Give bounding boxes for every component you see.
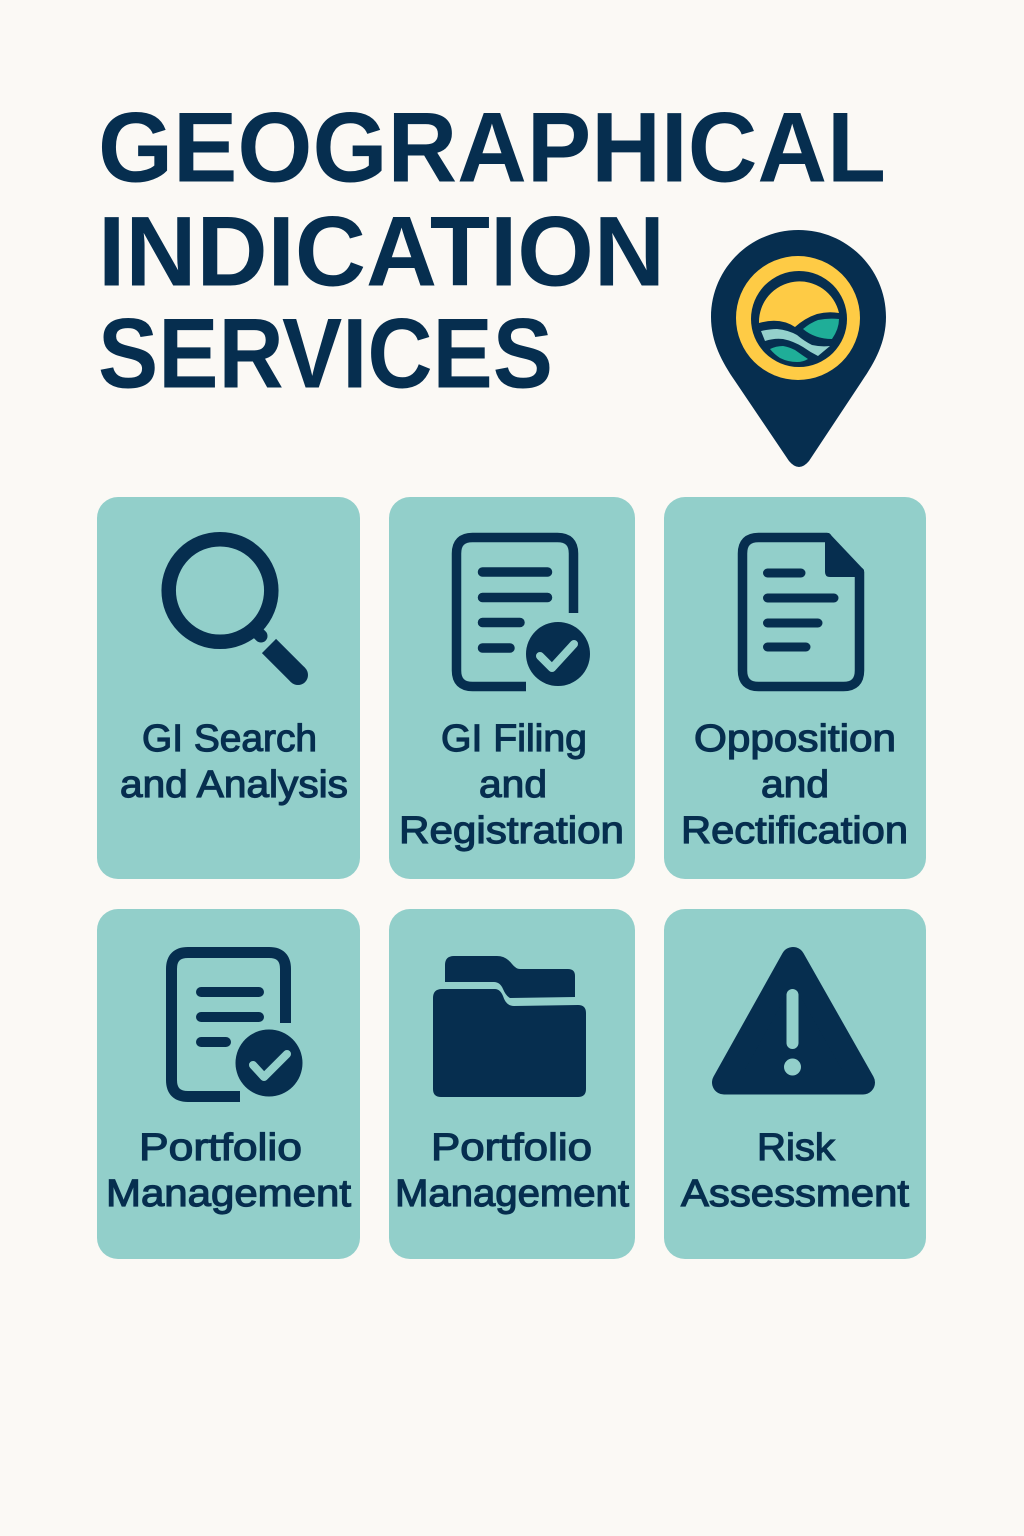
icon: magnifying glass: [169, 539, 308, 685]
icon: document with folded corner: [742, 533, 864, 686]
title: INDICATION: [98, 196, 665, 306]
label: Opposition and Rectification: Opposition: [694, 718, 896, 760]
card: Opposition and Rectification: [664, 497, 926, 879]
label: Portfolio Management: [395, 1127, 629, 1215]
card: GI Filing and Registration: [389, 497, 635, 879]
card: GI Search and Analysis: [97, 497, 360, 879]
card: Portfolio Management (document): [97, 909, 360, 1259]
label: GI Filing and Registration: and: [479, 764, 547, 806]
label: Opposition and Rectification: Rectification: [681, 810, 908, 852]
label: Risk Assessment: Risk: [757, 1127, 836, 1169]
label: GI Search and Analysis: [120, 718, 348, 806]
label: Portfolio Management: [106, 1127, 351, 1215]
icon: folder: [433, 956, 586, 1097]
label: Portfolio Management: Management: [395, 1173, 629, 1215]
label: Opposition and Rectification: and: [761, 764, 829, 806]
label: GI Filing and Registration: Registration: [399, 810, 624, 852]
icon: document with check: [172, 952, 302, 1096]
title: [98, 92, 886, 408]
icon: warning triangle: [724, 959, 863, 1082]
icon: location pin with landscape: [711, 230, 886, 467]
label: Portfolio Management: Portfolio: [139, 1127, 302, 1169]
label: GI Filing and Registration: [399, 718, 624, 852]
label: Opposition and Rectification: [681, 718, 908, 852]
icon: document with check: [456, 538, 590, 686]
label: Portfolio Management: Portfolio: [431, 1127, 592, 1169]
label: GI Search and Analysis: GI Search: [142, 718, 317, 760]
label: Risk Assessment: [681, 1127, 909, 1215]
label: GI Search and Analysis: and Analysis: [120, 764, 348, 806]
label: Portfolio Management: Management: [106, 1173, 351, 1215]
title: SERVICES: [98, 298, 553, 408]
card: Risk Assessment: [664, 909, 926, 1259]
card: Portfolio Management (folder): [389, 909, 635, 1259]
title: GEOGRAPHICAL: [98, 92, 886, 202]
label: Risk Assessment: Assessment: [681, 1173, 909, 1215]
label: GI Filing and Registration: GI Filing: [441, 718, 587, 760]
